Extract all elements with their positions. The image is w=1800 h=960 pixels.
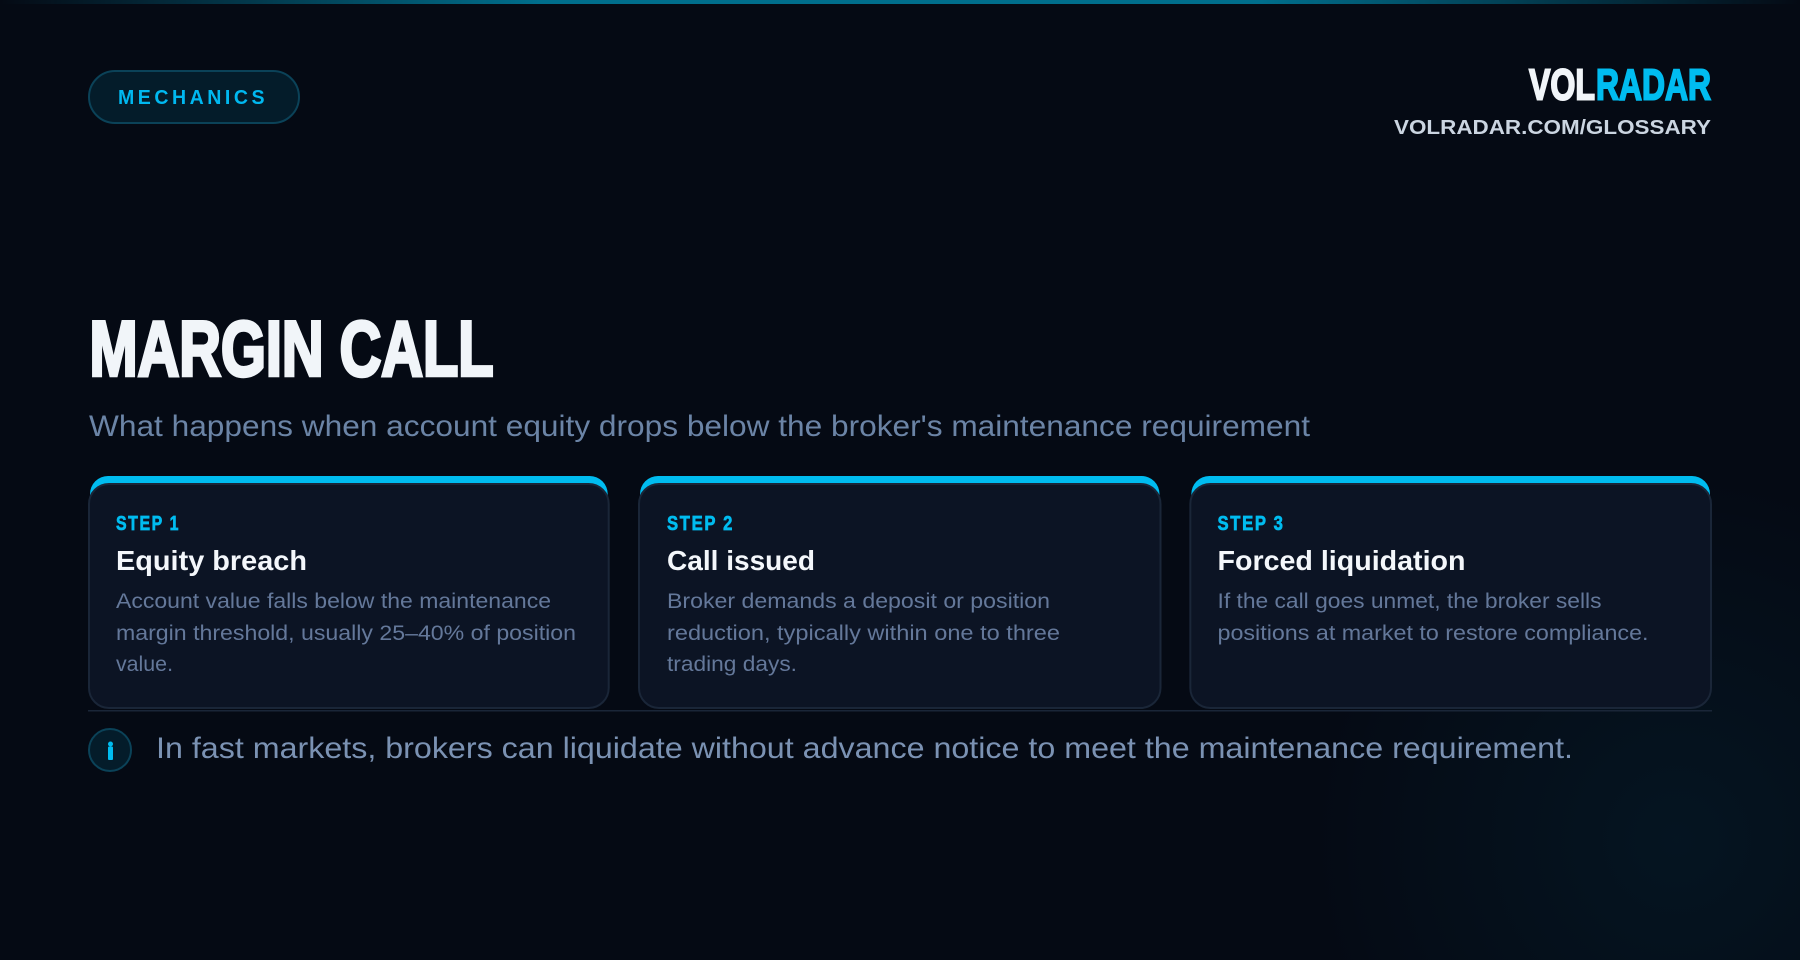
step label: STEP 1 [116,513,180,535]
step description: margin threshold, usually 25–40% of position [116,621,576,645]
brand logo: RADAR [1596,60,1711,110]
step label: STEP 3 [1218,513,1284,535]
category pill: mechanics: MECHANICS [118,87,268,109]
step description: value. [116,652,173,676]
title: MARGIN CALL [90,304,494,392]
step description: Account value falls below the maintenance [116,589,551,613]
note: In fast markets, brokers can liquidate without advance notice to meet the maintenance requirement. [156,732,1573,765]
divider line [88,710,1712,712]
step description: trading days. [667,652,797,676]
step description: Broker demands a deposit or position [667,589,1050,613]
step heading: Equity breach [116,545,307,576]
step description [1218,589,1648,645]
card: step 2 [639,476,1160,708]
step description [116,589,576,676]
step description: reduction, typically within one to three [667,621,1060,645]
step description [667,589,1060,676]
card: step 3 [1190,476,1711,708]
step label: STEP 2 [667,513,734,535]
card: step 1 [89,476,609,708]
icon: info [89,729,131,771]
step description: If the call goes unmet, the broker sells [1218,589,1602,613]
step heading: Call issued [667,545,815,576]
brand logo [1529,60,1711,110]
subtitle: What happens when account equity drops below the broker's maintenance requirement [89,410,1311,443]
step heading: Forced liquidation [1218,545,1466,576]
category pill: mechanics [89,71,299,123]
site url: VOLRADAR.COM/GLOSSARY [1394,117,1712,139]
brand logo: VOL [1529,60,1595,110]
step description: positions at market to restore compliance. [1218,621,1648,645]
